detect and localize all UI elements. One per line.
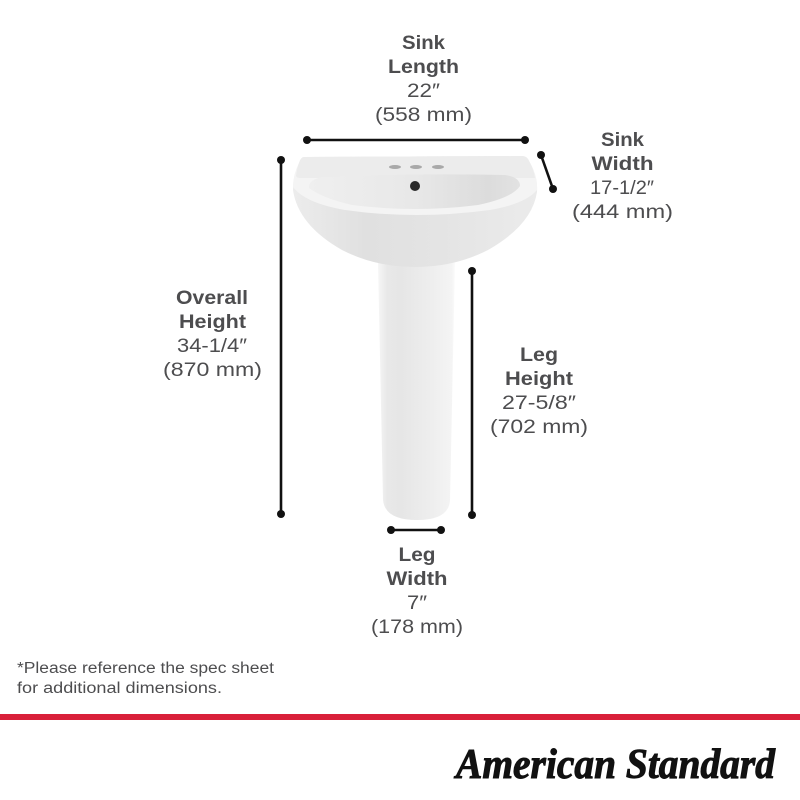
- dimension line: leg height: [468, 267, 476, 519]
- sink bowl: [293, 156, 537, 267]
- label: overall height: Overall: [176, 287, 248, 309]
- label: leg height: [490, 344, 588, 438]
- label: leg height: (702 mm): [490, 416, 588, 438]
- red divider bar: [0, 714, 800, 720]
- label: leg height: Height: [505, 368, 574, 390]
- sink illustration: [293, 156, 537, 520]
- dimension line: leg width: [387, 526, 445, 534]
- label: sink width: (444 mm): [572, 201, 673, 223]
- footnote: [17, 660, 275, 697]
- label: leg width: 7″: [407, 592, 427, 614]
- dimension line: sink length: [303, 136, 529, 144]
- label: leg height: Leg: [520, 344, 558, 366]
- label: sink length: [375, 32, 472, 126]
- label: leg width: [371, 544, 463, 638]
- label: leg width: Width: [386, 568, 448, 590]
- label: sink length: Length: [388, 56, 459, 78]
- label: overall height: 34-1/4″: [177, 335, 247, 357]
- footnote: *Please reference the spec sheet: [17, 660, 275, 677]
- label: sink length: 22″: [407, 80, 440, 102]
- label: leg width: (178 mm): [371, 616, 463, 638]
- drain hole: [410, 181, 420, 191]
- label: sink width: Width: [592, 153, 654, 175]
- label: overall height: Height: [179, 311, 247, 333]
- dimension line: overall height: [277, 156, 285, 518]
- label: sink width: [572, 129, 673, 223]
- logo: American Standard: American Standard: [453, 742, 776, 788]
- label: overall height: (870 mm): [163, 359, 262, 381]
- label: leg height: 27-5/8″: [502, 392, 576, 414]
- label: leg width: Leg: [398, 544, 436, 566]
- basin: [309, 174, 520, 209]
- faucet holes: [389, 165, 444, 169]
- sink rim: [293, 156, 537, 215]
- label: sink width: 17-1/2″: [590, 177, 654, 199]
- dimension line: sink width: [537, 151, 557, 193]
- label: overall height: [163, 287, 262, 381]
- label: sink length: (558 mm): [375, 104, 472, 126]
- pedestal leg: [378, 262, 455, 520]
- label: sink length: Sink: [402, 32, 445, 54]
- label: sink width: Sink: [601, 129, 644, 151]
- sink top deck: [296, 156, 535, 178]
- footnote: for additional dimensions.: [17, 680, 222, 697]
